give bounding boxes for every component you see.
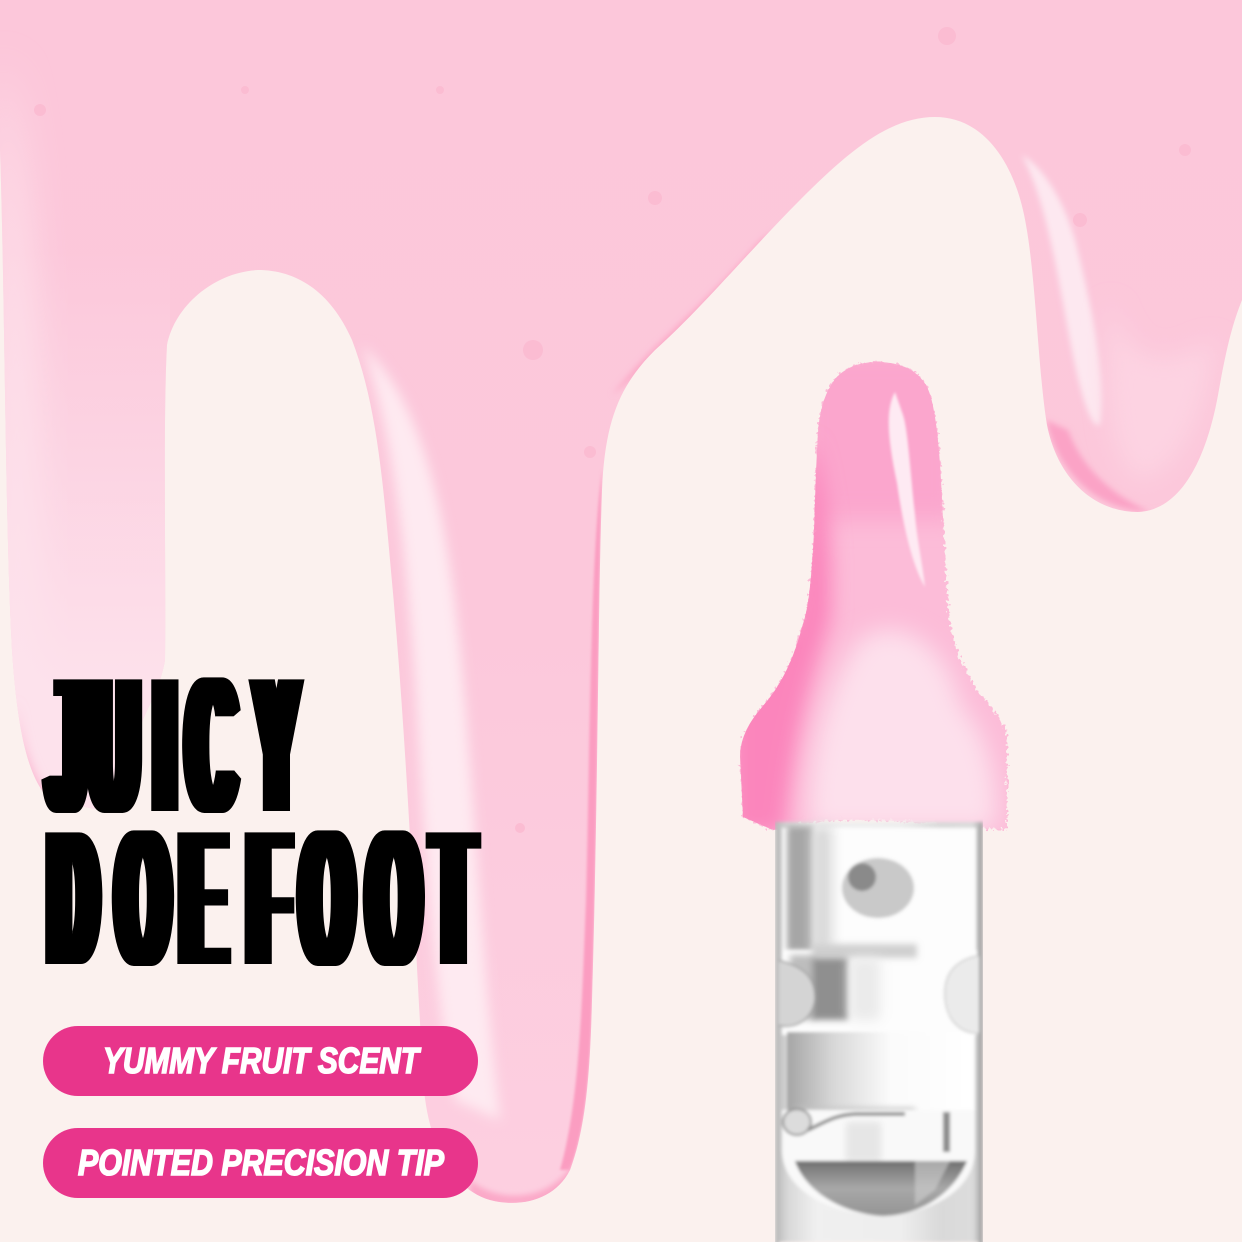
title: JUICY DOE FOOT: DOE FOOT	[50, 788, 473, 1010]
applicator: glass tube	[775, 822, 983, 1242]
pill: pointed precision tip: POINTED PRECISION TIP	[78, 1142, 445, 1183]
title: JUICY DOE FOOT	[49, 635, 473, 1010]
applicator: pink flocked tip	[730, 350, 1007, 835]
pill: pointed precision tip	[43, 1128, 478, 1198]
pill: yummy fruit scent	[43, 1026, 478, 1096]
title: JUICY DOE FOOT: JUICY	[49, 635, 298, 857]
pill: yummy fruit scent: YUMMY FRUIT SCENT	[103, 1040, 421, 1081]
